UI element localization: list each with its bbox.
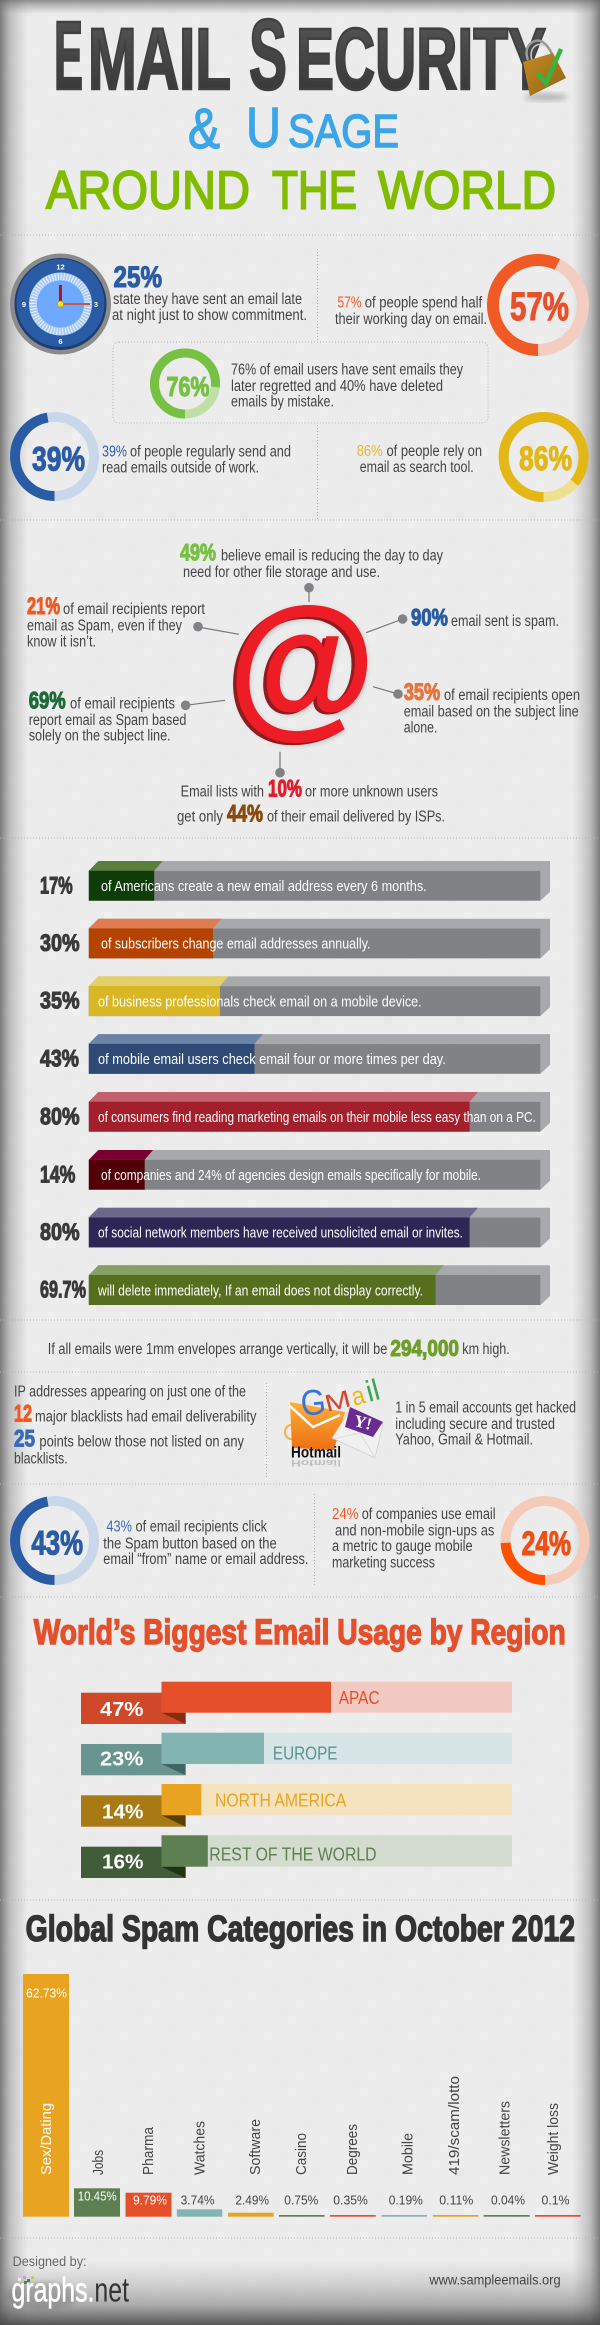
callout: 21 percent: 21% [27, 593, 60, 620]
heading: email security: S [249, 0, 287, 111]
donut: 86 percent: 86% [519, 440, 572, 478]
text: half working day: 57% [338, 294, 362, 312]
donut: 43 percent: 43% [31, 1524, 83, 1562]
icon: mail logos: a [348, 1379, 369, 1412]
icon: mail logos: Hotmail [291, 1444, 341, 1462]
heading: around the world [46, 160, 556, 220]
row: apac: APAC [339, 1688, 380, 1708]
bar: 43 percent [40, 1034, 550, 1074]
text: hacked accounts [395, 1399, 576, 1448]
row: apac [81, 1682, 512, 1724]
callout: 69 percent: 69% [29, 687, 66, 714]
panel: 39 percent stat [15, 417, 291, 496]
values: 0.75% [284, 2192, 319, 2207]
text: outside of work: of people regularly send and [130, 444, 291, 461]
row: north america [81, 1784, 512, 1827]
bar: 35 percent [40, 976, 550, 1016]
chart: usage by region [81, 1682, 512, 1878]
icon: mail logos: M [322, 1385, 354, 1418]
text: search tool: 86% [357, 443, 383, 460]
category labels: Weight loss [545, 2103, 562, 2175]
text: hacked accounts: Yahoo, Gmail & Hotmail. [395, 1431, 533, 1448]
text: blacklists fact: points below those not listed on any [39, 1434, 244, 1451]
text: mobile sign-ups: of companies use email [362, 1506, 496, 1523]
footer: designer credit [6, 2254, 129, 2310]
values: 0.11% [439, 2192, 474, 2207]
values: 10.45% [78, 2189, 117, 2204]
values: 0.19% [389, 2192, 423, 2207]
values: 62.73% [26, 1986, 67, 2001]
text: spam button: the Spam button based on the [103, 1535, 277, 1552]
text: late night: state they have sent an email late [113, 291, 302, 308]
row: north america: NORTH AMERICA [215, 1791, 346, 1811]
donut: 43 percent [15, 1501, 94, 1580]
values: 0.1% [542, 2192, 570, 2207]
heading: and usage: U [246, 96, 281, 160]
donut: 24 percent: 24% [522, 1525, 571, 1563]
category labels: Sex/Dating [38, 2103, 55, 2175]
bar: 80 percent social: 80% [40, 1219, 80, 1246]
row: europe [81, 1733, 512, 1775]
title [46, 0, 556, 220]
text: spam button: 43% [106, 1519, 132, 1536]
panel: 86 percent stat [357, 417, 584, 497]
icon: clock [10, 254, 111, 354]
callout: unknown users [177, 776, 445, 828]
panel: 24 percent stat [332, 1501, 584, 1580]
callout: unknown users: 44% [227, 801, 263, 828]
footer: designer credit: Designed by: [13, 2254, 87, 2269]
callout: 21 percent: email as Spam, even if they [27, 618, 182, 635]
callout: 21 percent: know it isn’t. [27, 634, 96, 651]
text: blacklists fact: 12 [14, 1401, 32, 1428]
icon: mail logos: Y! [352, 1411, 374, 1434]
text: envelopes fact: If all emails were 1mm envelopes arrange vertically, it will be [48, 1341, 387, 1358]
text: blacklists fact: IP addresses appearing on just one of the [14, 1384, 246, 1401]
panel: percentage bars [40, 861, 550, 1305]
text: outside of work: read emails outside of work. [102, 459, 259, 476]
text: envelopes fact: km high. [462, 1341, 510, 1358]
category labels: Degrees [344, 2124, 361, 2175]
text: regretted emails [231, 361, 463, 411]
stat: 25 percent: 25% [114, 261, 162, 294]
text: mobile sign-ups: a metric to gauge mobile [332, 1538, 473, 1555]
bar: 14 percent: 14% [40, 1161, 75, 1188]
text: late night [112, 291, 307, 324]
footer: website: www.sampleemails.org [428, 2272, 561, 2287]
callout: unknown users: 10% [268, 776, 302, 803]
bar: 14 percent: of companies and 24% of agencies design emails specifically for mobile. [101, 1168, 481, 1184]
callout: 35 percent: alone. [404, 719, 437, 736]
callout: 49 percent [180, 540, 443, 581]
text: blacklists fact [14, 1384, 257, 1467]
values: 2.49% [235, 2192, 269, 2207]
values: 9.79% [133, 2192, 167, 2207]
callout: unknown users: or more unknown users [305, 784, 438, 801]
bar: 14 percent [40, 1150, 550, 1190]
footer: designer credit: graphs.net [12, 2272, 129, 2310]
text: half working day [335, 294, 487, 328]
category labels: Jobs [90, 2150, 107, 2175]
row: rest of the world [81, 1835, 512, 1878]
bar: 17 percent: of Americans create a new email address every 6 months. [101, 879, 427, 895]
bars [23, 1974, 581, 2217]
icon: clock: 9 [22, 300, 26, 309]
text: regretted emails: 76% of email users have sent emails they [231, 361, 463, 378]
callout: unknown users: Email lists with [181, 784, 264, 801]
icon: at sign: @ [222, 580, 370, 756]
text: blacklists fact: blacklists. [14, 1450, 68, 1467]
donut: 57 percent: 57% [510, 285, 569, 329]
callout: 49 percent: 49% [180, 540, 216, 567]
text: regretted emails: emails by mistake. [231, 394, 334, 411]
heading: email security: MAIL [88, 11, 231, 108]
donut: 86 percent [504, 417, 584, 497]
bar: 80 percent consumers: 80% [40, 1103, 80, 1130]
donut: 57 percent [493, 260, 583, 350]
icon: mail logos: Hotmail [291, 1458, 341, 1469]
row: rest of the world: 16% [102, 1851, 144, 1873]
bar: 30 percent [40, 919, 550, 958]
callout: 49 percent: need for other file storage and use. [183, 564, 380, 581]
donut: 76 percent [154, 353, 216, 414]
category labels: 419/scam/lotto [446, 2076, 463, 2175]
text: mobile sign-ups: and non-mobile sign-ups as [335, 1522, 495, 1539]
text: envelopes fact: 294,000 [390, 1335, 459, 1361]
panel: 76 percent stat [113, 342, 488, 423]
row: europe: 23% [100, 1749, 144, 1771]
bar: 30 percent: of subscribers change email addresses annually. [101, 937, 370, 953]
bar: 80 percent social [40, 1208, 550, 1247]
donut: 39 percent: 39% [32, 441, 85, 479]
icon: clock: 3 [94, 300, 98, 309]
icon: padlock with check [523, 41, 568, 100]
bar: 17 percent: 17% [40, 872, 73, 899]
text: mobile sign-ups [332, 1506, 496, 1572]
text: half working day: their working day on email. [335, 311, 487, 328]
donut: 39 percent [15, 417, 94, 496]
callout: 69 percent: of email recipients [70, 696, 175, 712]
icon: clock: 6 [58, 337, 63, 346]
bar: 69.7 percent: 69.7% [40, 1277, 86, 1304]
callout: unknown users: get only [177, 809, 223, 826]
panel: at sign callouts [27, 540, 580, 828]
heading: around the world: AROUND [46, 160, 250, 220]
text: search tool: of people rely on [386, 443, 482, 460]
text: spam button [103, 1519, 308, 1568]
text: late night: at night just to show commitment. [112, 307, 307, 324]
chart: spam categories [23, 1974, 581, 2217]
donut: 76 percent: 76% [166, 371, 210, 402]
callout: 35 percent [404, 679, 580, 736]
icon: mail logos: il [362, 1374, 383, 1409]
bar: 80 percent social: of social network members have received unsolicited email or invites. [98, 1226, 463, 1242]
text: regretted emails: later regretted and 40% have deleted [231, 378, 443, 395]
text: outside of work [102, 444, 291, 476]
panel: 43 percent stat [15, 1501, 308, 1580]
icon: at sign: @ [226, 578, 373, 754]
text: blacklists fact: 25 [14, 1426, 35, 1453]
text: spam button: email “from” name or email address. [103, 1551, 308, 1568]
row: europe: EUROPE [273, 1743, 338, 1763]
callout: 49 percent: believe email is reducing the day to day [221, 548, 443, 565]
panel: 57 percent stat [335, 260, 583, 350]
text: envelopes fact [48, 1335, 510, 1361]
values [26, 1986, 570, 2207]
category labels: Casino [293, 2133, 310, 2175]
text: blacklists fact: major blacklists had email deliverability [35, 1409, 257, 1426]
row: apac: 47% [100, 1699, 144, 1721]
bar: 35 percent: 35% [40, 988, 80, 1015]
text: search tool: email as search tool. [360, 459, 474, 476]
heading: email security [54, 0, 546, 111]
text: mobile sign-ups: 24% [332, 1506, 359, 1523]
icon: clock: 12 [56, 262, 65, 272]
callout: 69 percent: solely on the subject line. [29, 728, 171, 745]
icon: mail logos: G [299, 1381, 328, 1424]
heading: around the world: WORLD [378, 160, 556, 220]
bar: 30 percent: 30% [40, 930, 80, 957]
bar: 35 percent: of business professionals check email on a mobile device. [98, 994, 422, 1010]
callout: 69 percent [29, 687, 186, 745]
text: mobile sign-ups: marketing success [332, 1555, 435, 1572]
text: half working day: of people spend half [365, 294, 483, 312]
bar: 69.7 percent: will delete immediately, If an email does not display correctly. [97, 1283, 423, 1299]
icon: at sign: @ [226, 580, 373, 756]
callout: 35 percent: 35% [404, 679, 440, 706]
row: north america: 14% [102, 1801, 144, 1823]
category labels: Newsletters [497, 2101, 514, 2175]
callout: 21 percent [27, 593, 206, 651]
callout: 90 percent: email sent is spam. [451, 613, 559, 630]
bar: 80 percent consumers [40, 1092, 550, 1132]
callout: 69 percent: report email as Spam based [29, 712, 186, 729]
heading: email security: E [54, 1, 83, 110]
heading: around the world: THE [272, 160, 357, 220]
heading: and usage: SAGE [288, 105, 399, 157]
bar: 17 percent [40, 861, 550, 901]
category labels: Software [247, 2119, 264, 2175]
values: 0.04% [491, 2192, 525, 2207]
panel: clock stat [10, 254, 307, 354]
bar: 69.7 percent [40, 1265, 550, 1305]
category labels: Watches [192, 2121, 208, 2175]
values: 0.35% [333, 2192, 368, 2207]
callout connectors [181, 583, 407, 778]
text: hacked accounts: including secure and trusted [395, 1416, 555, 1433]
heading: and usage [188, 96, 399, 161]
callout: unknown users: of their email delivered by ISPs. [267, 809, 445, 826]
row: rest of the world: REST OF THE WORLD [209, 1845, 377, 1865]
donut: 24 percent [506, 1501, 584, 1580]
category labels [38, 2076, 562, 2175]
callout: 21 percent: of email recipients report [63, 601, 206, 618]
callout: 90 percent: 90% [411, 605, 448, 632]
bar: 43 percent: of mobile email users check email four or more times per day. [98, 1052, 446, 1068]
text: spam button: of email recipients click [136, 1519, 267, 1536]
callout: 90 percent [411, 605, 559, 632]
icon: mail logos [285, 1374, 383, 1469]
category labels: Pharma [140, 2126, 157, 2175]
heading: and usage: & [188, 97, 220, 161]
text: search tool [357, 443, 482, 476]
text: outside of work: 39% [102, 444, 127, 461]
bar: 43 percent: 43% [40, 1045, 79, 1072]
category labels: Mobile [400, 2133, 416, 2175]
values: 3.74% [181, 2192, 215, 2207]
